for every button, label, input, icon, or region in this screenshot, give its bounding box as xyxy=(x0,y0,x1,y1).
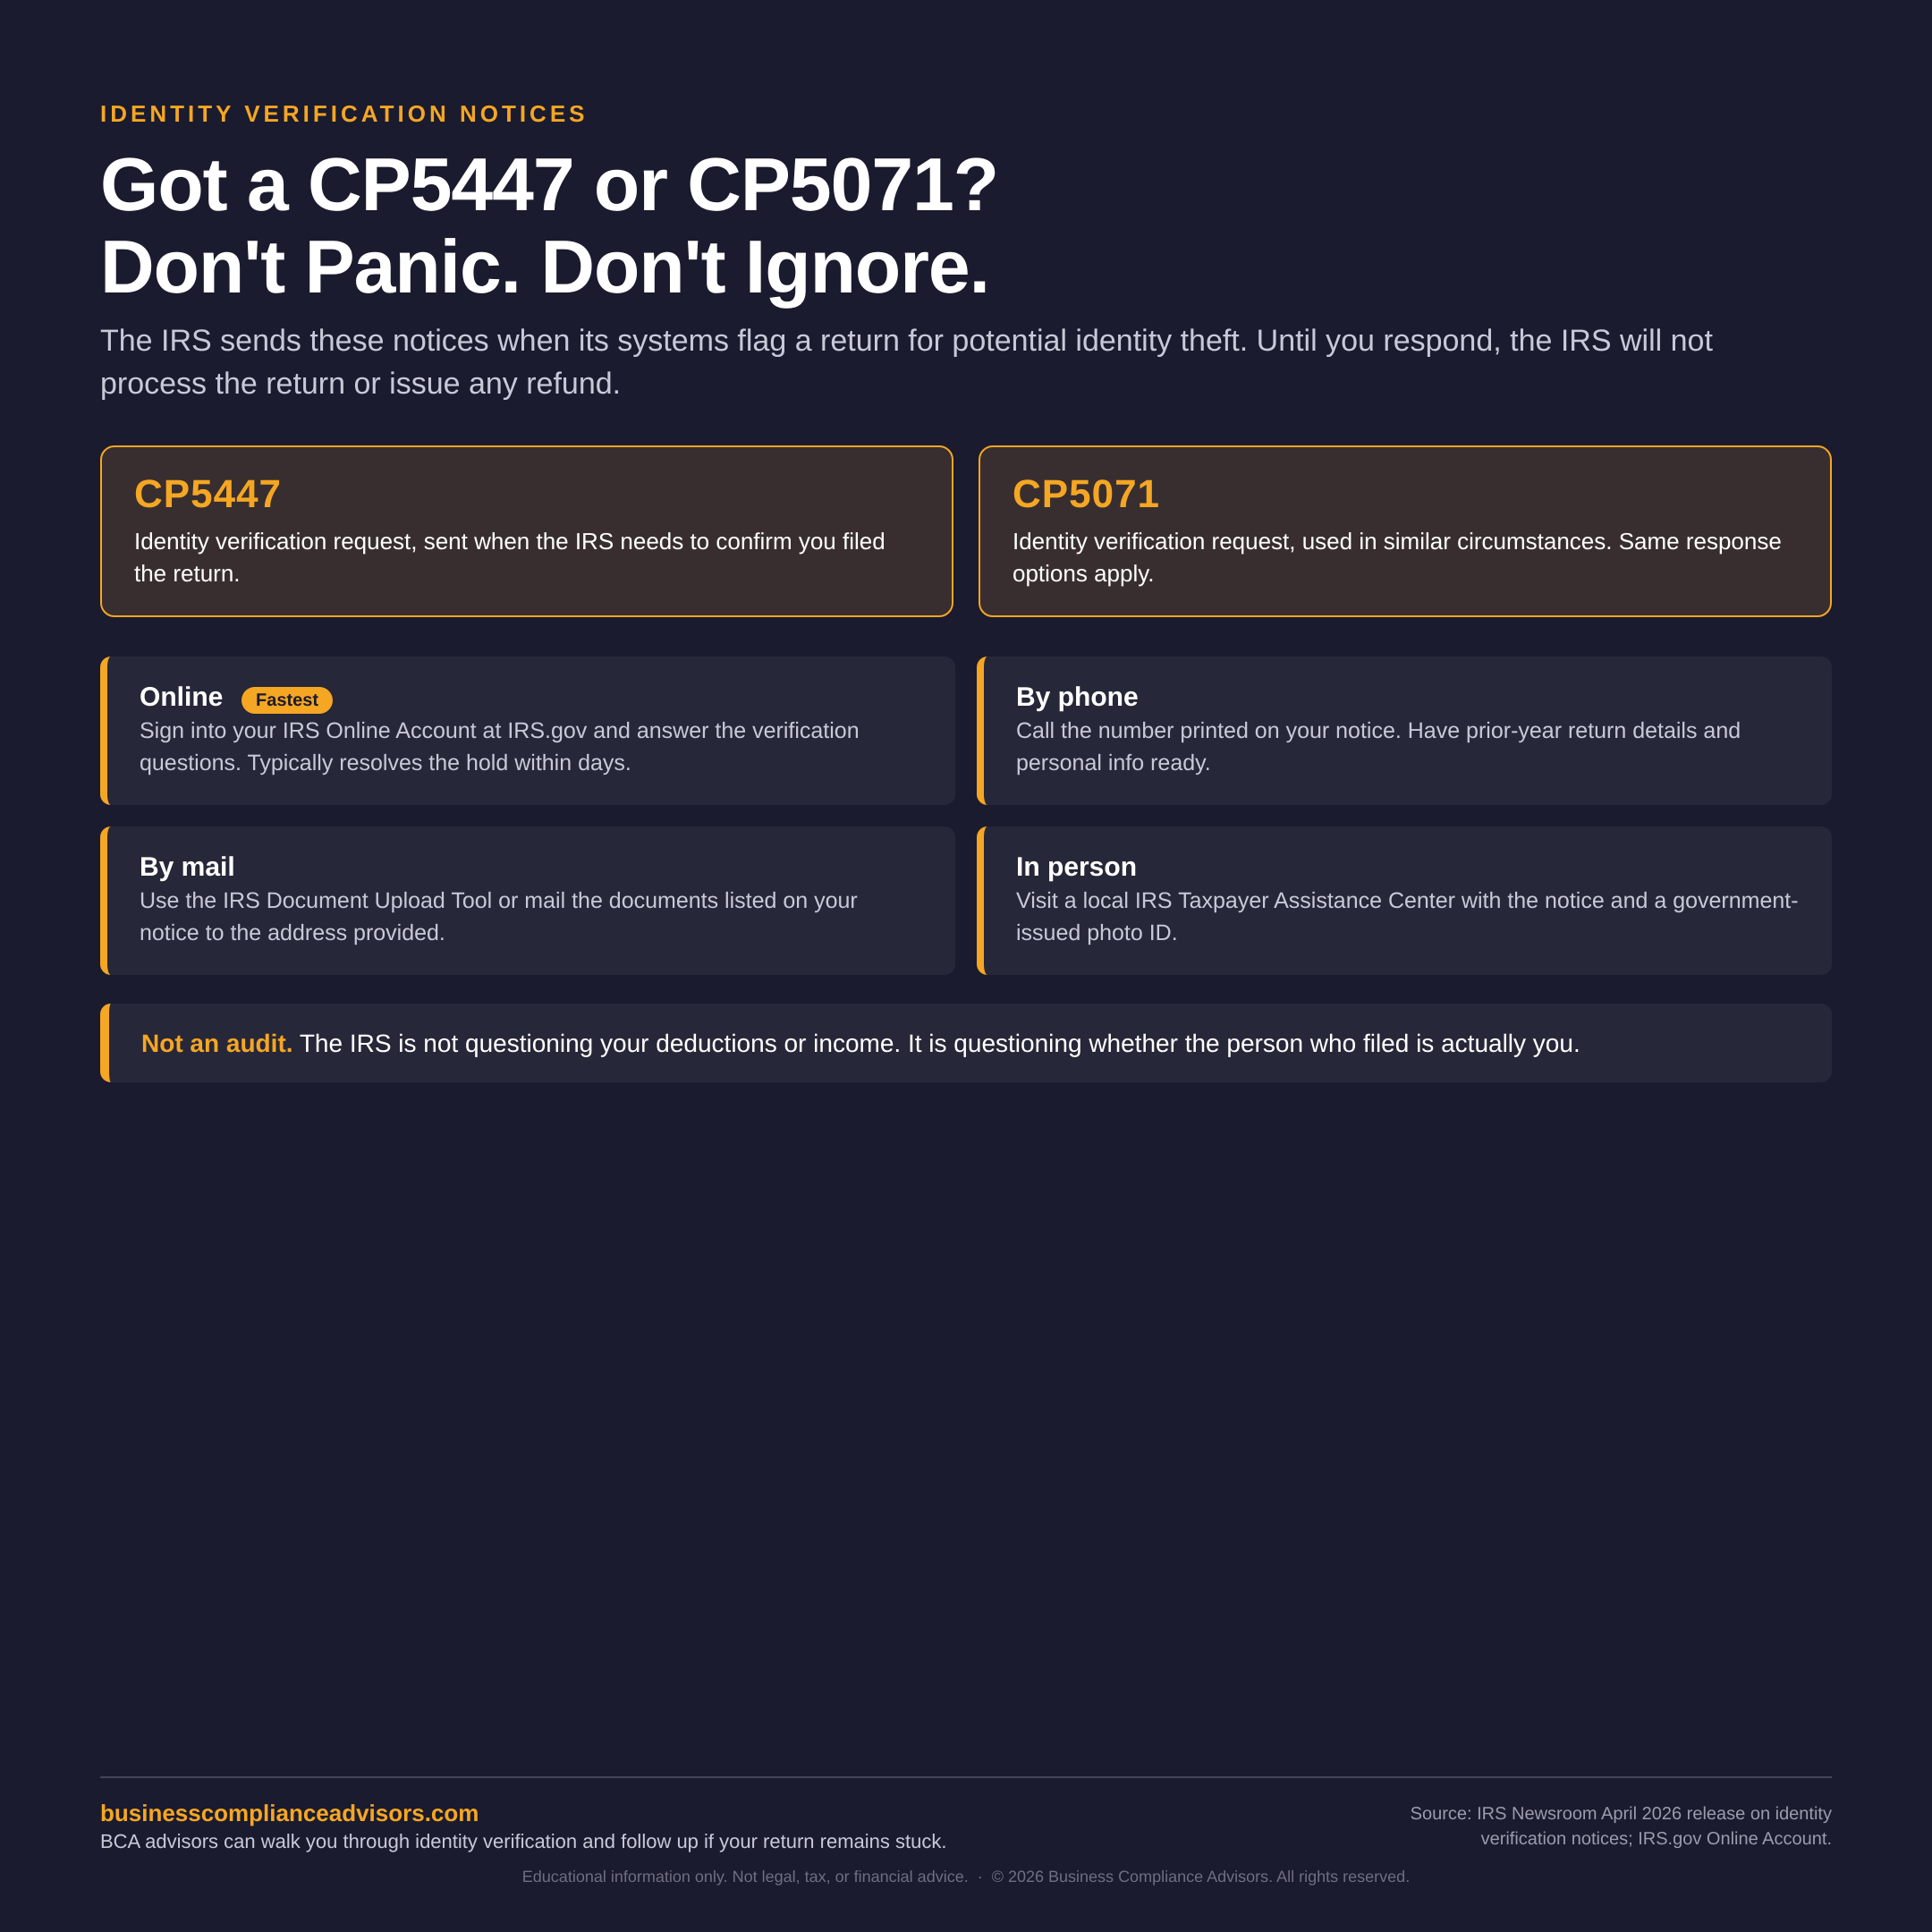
panel: CP5071 notice xyxy=(979,445,1832,617)
online description xyxy=(140,718,860,775)
mail description: notice to the address provided. xyxy=(140,920,445,945)
title: Don't Panic. Don't Ignore. xyxy=(100,225,989,309)
panel: online option xyxy=(100,657,955,805)
mail description xyxy=(140,888,858,945)
in person description: issued photo ID. xyxy=(1016,920,1178,945)
title: Got a CP5447 or CP5071? xyxy=(100,142,998,226)
online heading: Online xyxy=(140,682,223,712)
source note xyxy=(1411,1804,1832,1849)
panel: CP5447 notice xyxy=(100,445,953,617)
badge: fastest xyxy=(242,687,333,714)
phone description xyxy=(1016,718,1741,775)
phone heading: By phone xyxy=(1016,682,1139,712)
intro text: The IRS sends these notices when its systems flag a return for potential identity theft. Until you respond, the IRS will not xyxy=(100,324,1713,358)
disclaimer: Educational information only. Not legal, tax, or financial advice. · © 2026 Business Compliance Advisors. All rights reserved. xyxy=(522,1868,1410,1885)
callout text: Not an audit. The IRS is not questioning your deductions or income. It is questioning whether the person who filed is actually you. xyxy=(141,1030,1580,1057)
phone description: personal info ready. xyxy=(1016,750,1211,775)
title xyxy=(100,142,998,309)
phone description: Call the number printed on your notice. Have prior-year return details and xyxy=(1016,718,1741,743)
in person heading: In person xyxy=(1016,852,1137,882)
in person description: Visit a local IRS Taxpayer Assistance Center with the notice and a government- xyxy=(1016,888,1799,913)
source note: verification notices; IRS.gov Online Account. xyxy=(1481,1829,1832,1849)
CP5447 description xyxy=(134,528,886,587)
mail heading: By mail xyxy=(140,852,235,882)
footer website: businesscomplianceadvisors.com xyxy=(100,1800,479,1826)
footer divider xyxy=(100,1776,1832,1778)
CP5071 description: Identity verification request, used in similar circumstances. Same response xyxy=(1013,528,1782,555)
CP5071 description: options apply. xyxy=(1013,560,1155,587)
eyebrow heading: IDENTITY VERIFICATION NOTICES xyxy=(100,100,589,127)
CP5447 heading: CP5447 xyxy=(134,472,282,516)
online description: Sign into your IRS Online Account at IRS.gov and answer the verification xyxy=(140,718,860,743)
CP5447 description: Identity verification request, sent when the IRS needs to confirm you filed xyxy=(134,528,886,555)
callout: not an audit xyxy=(100,1004,1832,1082)
panel: mail option xyxy=(100,826,955,975)
intro text xyxy=(100,324,1713,401)
online description: questions. Typically resolves the hold within days. xyxy=(140,750,631,775)
footer call to action: BCA advisors can walk you through identity verification and follow up if your return remains stuck. xyxy=(100,1830,946,1852)
panel: phone option xyxy=(977,657,1832,805)
panel: in person option xyxy=(977,826,1832,975)
CP5071 heading: CP5071 xyxy=(1013,472,1160,516)
CP5071 description xyxy=(1013,528,1782,587)
CP5447 description: the return. xyxy=(134,560,241,587)
intro text: process the return or issue any refund. xyxy=(100,367,621,401)
in person description xyxy=(1016,888,1799,945)
mail description: Use the IRS Document Upload Tool or mail the documents listed on your xyxy=(140,888,858,913)
source note: Source: IRS Newsroom April 2026 release on identity xyxy=(1411,1804,1832,1824)
badge: fastest: Fastest xyxy=(256,691,318,710)
